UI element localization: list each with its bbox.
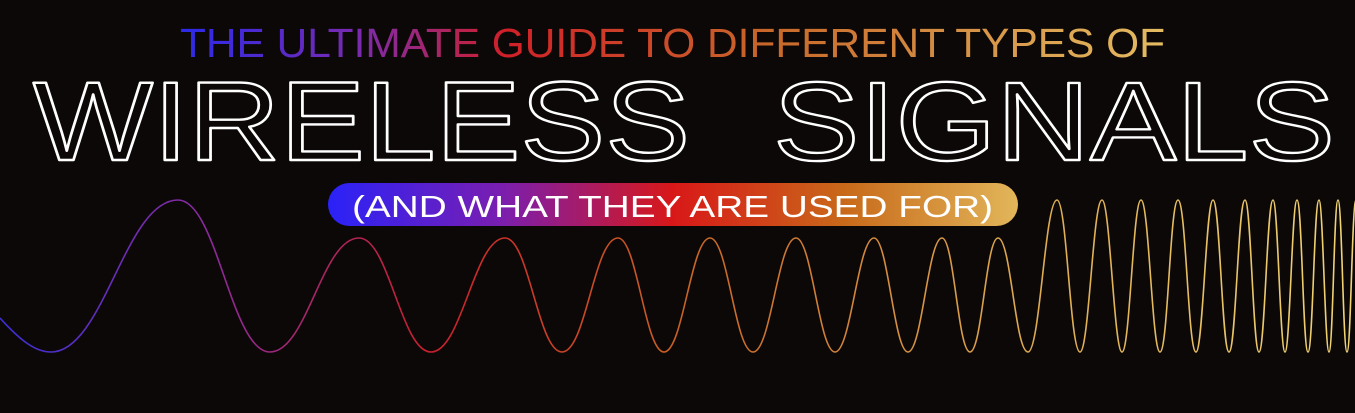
heading: WIRELESS SIGNALS: WIRELESS xyxy=(33,59,690,184)
heading: WIRELESS SIGNALS xyxy=(33,59,1335,184)
heading: WIRELESS SIGNALS: SIGNALS xyxy=(773,59,1335,184)
title line: THE ULTIMATE GUIDE TO DIFFERENT TYPES OF xyxy=(180,20,1165,66)
wave xyxy=(0,200,1355,352)
subtitle pill xyxy=(328,183,1018,226)
subtitle pill: (AND WHAT THEY ARE USED FOR) xyxy=(352,189,993,224)
